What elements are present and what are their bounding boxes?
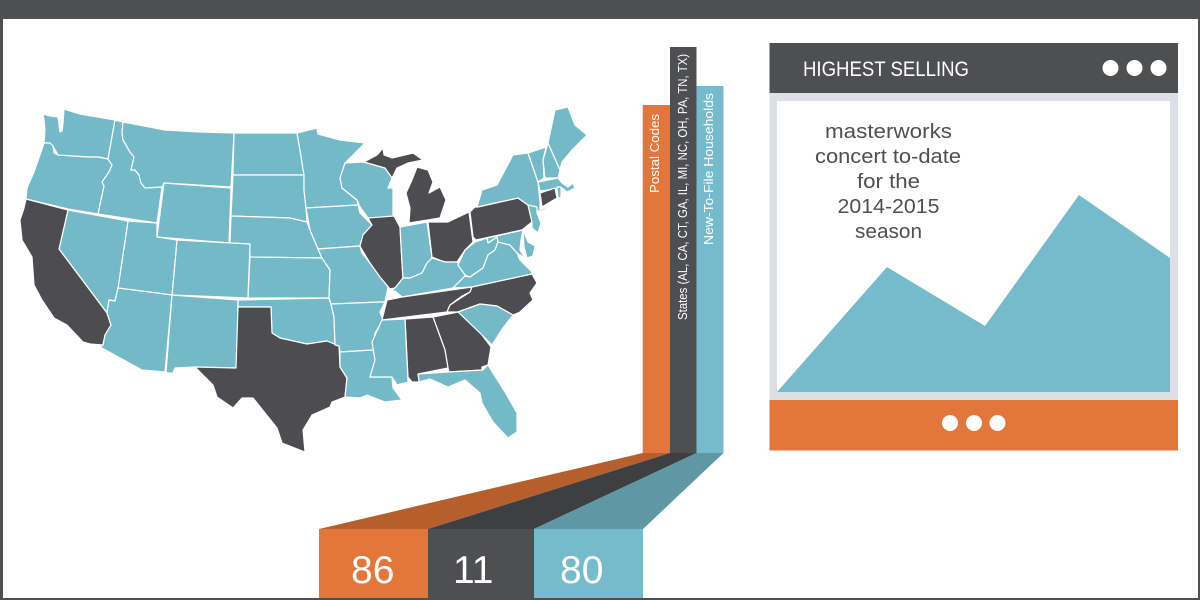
description text: season <box>855 221 922 243</box>
block: 80: 80 <box>560 549 603 592</box>
state: New Mexico <box>166 295 238 373</box>
state: Mississippi <box>370 319 408 385</box>
heading: HIGHEST SELLING <box>803 58 969 81</box>
bar: Postal Codes: Postal Codes <box>647 113 662 193</box>
state: New York <box>477 153 540 212</box>
state: Tennessee <box>382 287 472 320</box>
perspective shade: teal <box>534 453 724 529</box>
state: Lower Michigan <box>406 167 446 223</box>
state: Ohio <box>428 212 473 262</box>
state: Delaware and Delmarva <box>523 230 535 258</box>
description text: 2014-2015 <box>838 196 940 218</box>
state: South Carolina <box>458 304 513 345</box>
description text: concert to-date <box>815 146 961 168</box>
state: North Carolina <box>447 274 537 315</box>
state: New Jersey <box>528 205 541 233</box>
block: 86 <box>319 529 428 598</box>
state: Iowa <box>306 205 372 249</box>
state: Wyoming <box>157 183 231 243</box>
state: Alabama <box>405 317 448 382</box>
state: North Dakota <box>233 133 304 175</box>
state: Kentucky <box>390 258 465 297</box>
window body <box>770 93 1178 400</box>
count blocks <box>319 529 643 598</box>
state: Long Island <box>540 203 553 212</box>
state: Nebraska <box>230 216 322 258</box>
panel: highest selling window <box>770 43 1178 450</box>
state: Wisconsin <box>340 162 393 218</box>
state: Florida <box>418 365 517 438</box>
state: Idaho <box>98 120 162 223</box>
state: Massachusetts <box>538 178 575 192</box>
bar: States <box>670 47 696 453</box>
US map <box>20 107 587 452</box>
bar: Postal Codes <box>643 105 670 453</box>
state: Kansas <box>248 257 330 298</box>
bar: States: States (AL, CA, CT, GA, IL, MI, NC, OH, PA, TN, TX) <box>675 54 690 320</box>
description text: for the <box>857 171 920 193</box>
state: Louisiana <box>340 350 402 402</box>
state: Pennsylvania <box>470 198 532 240</box>
state: Maine <box>548 107 587 170</box>
state: Washington <box>43 109 115 159</box>
state: South Dakota <box>231 175 307 222</box>
state: Texas <box>195 307 347 452</box>
icon: header dots <box>1102 60 1166 76</box>
window content area <box>777 101 1170 392</box>
state: Illinois <box>360 216 403 289</box>
block: 11 <box>428 529 534 598</box>
block: 11: 11 <box>453 549 494 592</box>
state: Montana <box>122 122 234 188</box>
window footer <box>770 400 1178 450</box>
state: Indiana <box>400 222 432 278</box>
perspective shade: orange <box>319 453 670 529</box>
state: Connecticut <box>540 188 557 207</box>
state: Oklahoma <box>238 298 335 345</box>
state: Utah <box>118 221 177 295</box>
state: Virginia <box>453 242 532 288</box>
state: Nevada <box>59 210 128 313</box>
state: Upper Michigan <box>364 148 423 178</box>
description text: masterworks <box>825 121 952 143</box>
block: 80 <box>534 529 643 598</box>
description text <box>815 121 961 243</box>
state: Arizona <box>100 288 172 372</box>
state: West Virginia <box>458 237 498 277</box>
state: Minnesota <box>297 128 365 208</box>
funnel bars <box>319 47 724 529</box>
state: Colorado <box>172 240 250 298</box>
state: Arkansas <box>331 302 385 352</box>
state: Maryland <box>487 230 525 258</box>
state: Missouri <box>318 246 388 304</box>
state: New Hampshire <box>543 143 560 178</box>
state: California <box>20 199 111 345</box>
icon: footer dots <box>942 415 1006 431</box>
state: Oregon <box>26 143 112 214</box>
state: Vermont <box>528 147 546 182</box>
window header <box>770 43 1178 93</box>
state: Georgia <box>433 312 491 372</box>
state: Rhode Island <box>557 187 561 198</box>
area chart <box>777 195 1170 392</box>
block: 86: 86 <box>351 549 394 592</box>
perspective shade: dark <box>428 453 696 529</box>
bar: New-To-File Households: New-To-File Households <box>701 92 716 245</box>
bar: New-To-File Households <box>696 86 724 453</box>
